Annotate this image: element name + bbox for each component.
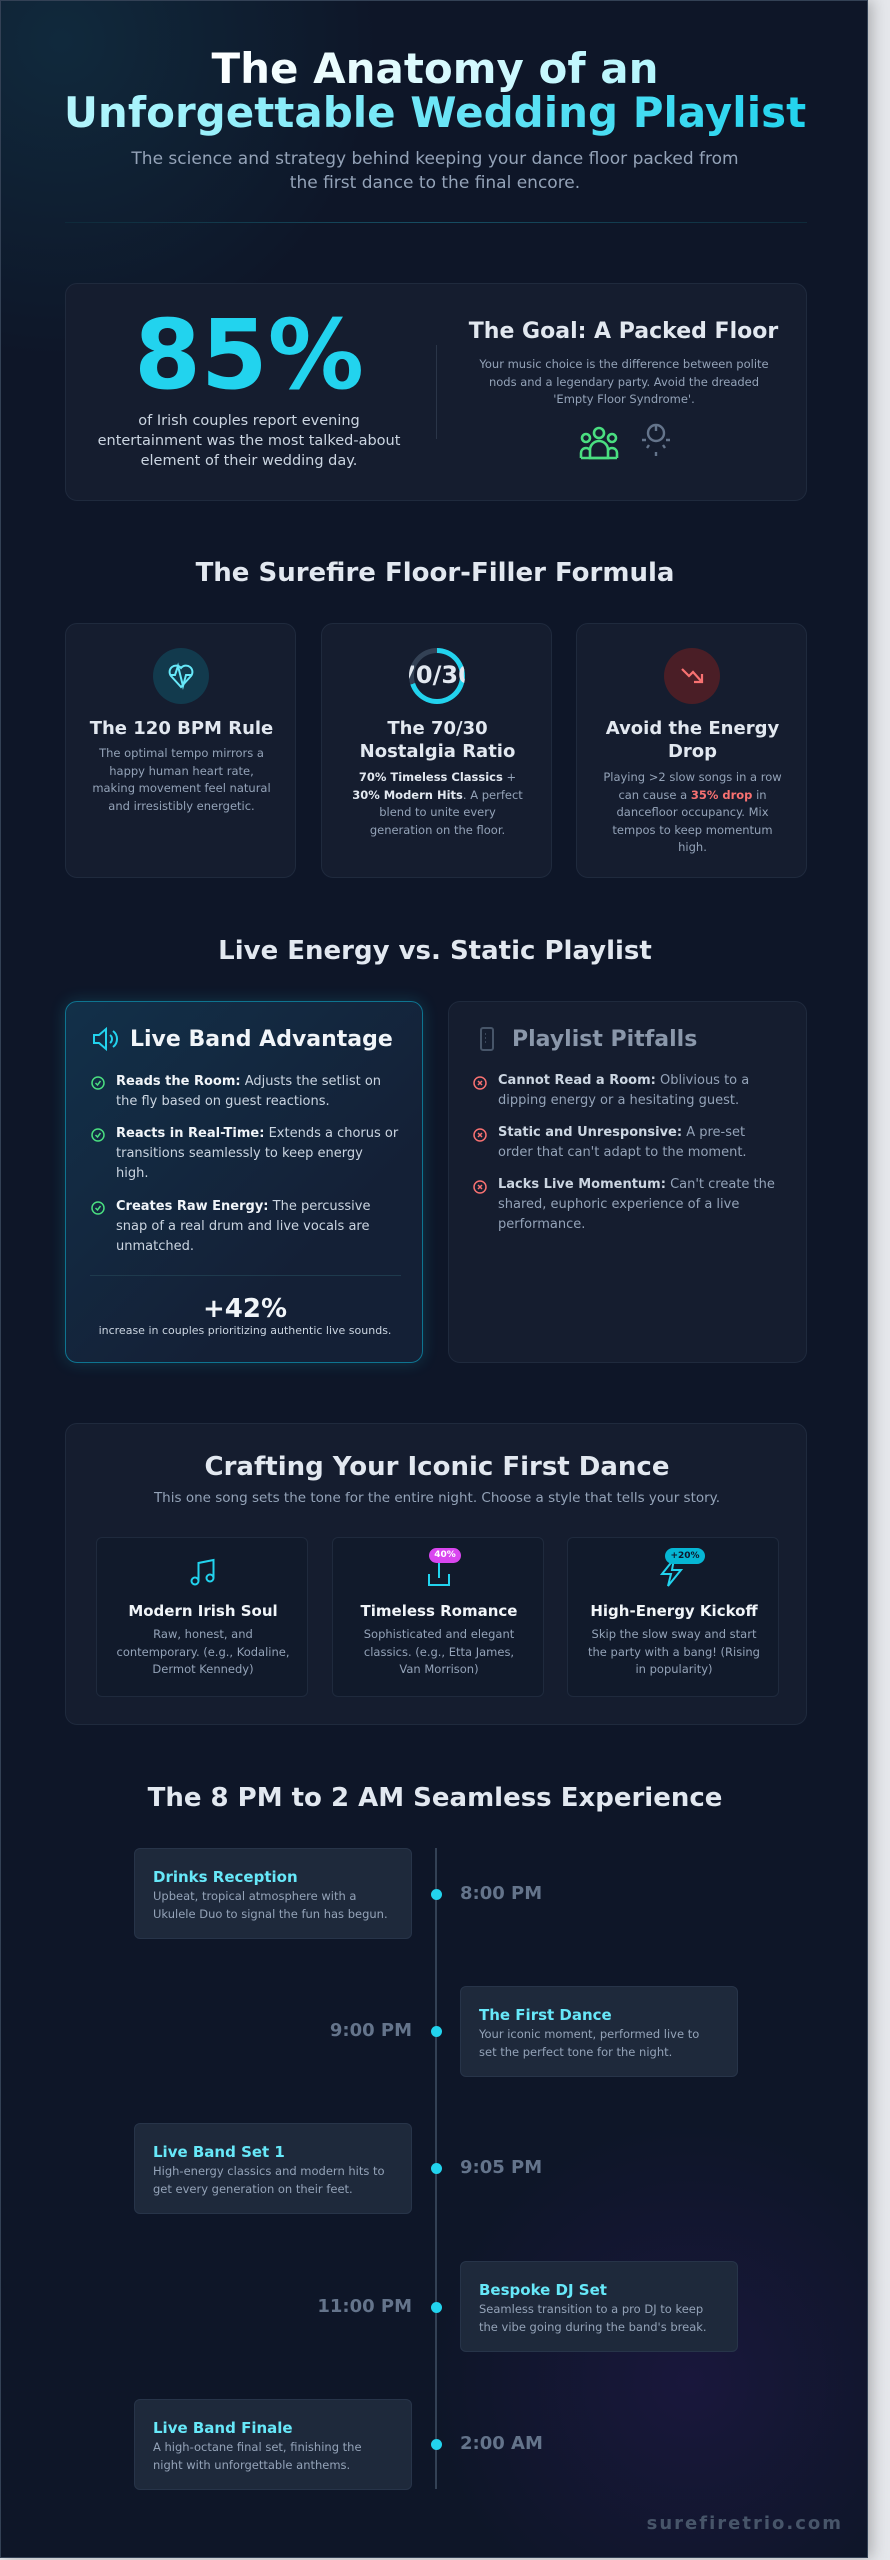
event: DJ set: [317, 2261, 738, 2352]
subtitle: The science and strategy behind keeping your dance floor packed from the first dance to the final encore.: [131, 149, 739, 193]
stat: +42%: +42%: [203, 1294, 287, 1324]
event: drinks reception: Ukulele Duo to signal the fun has begun.: [153, 1907, 388, 1921]
event: first dance: Your iconic moment, performed live to set the perfect tone for the night.: [479, 2027, 699, 2059]
heading: formula: The Surefire Floor-Filler Formula: [196, 558, 674, 588]
list: advantages: Creates Raw Energy: The percussive snap of a real drum and live vocals are unmatched.: [116, 1199, 370, 1254]
card text: The optimal tempo mirrors a happy human heart rate, making movement feel natural and irresistibly energetic.: [92, 746, 271, 812]
icon: ratio ring: [409, 648, 465, 704]
option: timeless romance: Timeless Romance: [361, 1602, 517, 1620]
event: finale: [134, 2399, 543, 2490]
event: DJ set: Bespoke DJ Set: [479, 2281, 607, 2299]
list: advantages: high.: [116, 1166, 148, 1181]
option: modern irish soul: [96, 1537, 308, 1697]
list: advantages: Reads the Room: Adjusts the setlist on the fly based on guest reactions.: [116, 1074, 381, 1109]
panel: live band: [65, 1001, 423, 1363]
event: finale: Live Band Finale: [153, 2419, 293, 2437]
event: drinks reception: [134, 1848, 542, 1939]
card title: Avoid the Energy: [606, 718, 779, 739]
event: first dance: 9:00 PM: [330, 2020, 412, 2041]
event: live band set 1: [134, 2123, 542, 2214]
panel: energy drop: [576, 623, 807, 878]
event: finale: 2:00 AM: [460, 2433, 543, 2454]
title: Unforgettable Wedding Playlist: [64, 88, 806, 137]
goal text: Your music choice is the difference between polite nods and a legendary party. Avoid the dreaded 'Empty Floor Syndrome'.: [479, 357, 769, 406]
heading: Playlist Pitfalls: [512, 1027, 697, 1052]
panel: first dance: [65, 1423, 807, 1725]
card title: Drop: [668, 741, 717, 762]
panel: 120 BPM: [65, 623, 296, 878]
panel: stat card: [65, 283, 807, 501]
option: modern irish soul: Modern Irish Soul: [128, 1602, 278, 1620]
card title: The 70/30: [387, 718, 488, 739]
stat caption: increase in couples prioritizing authentic live sounds.: [99, 1324, 391, 1337]
list: pitfalls: [473, 1073, 775, 1232]
heading: live vs static: Live Energy vs. Static Playlist: [218, 936, 652, 966]
option: timeless romance: Sophisticated and elegant classics. (e.g., Etta James, Van Morrison): [364, 1627, 514, 1676]
icon: disco ball: [642, 424, 670, 456]
icon: trend down: [664, 648, 720, 704]
card title: [360, 718, 515, 762]
title: The Anatomy of an: [211, 44, 659, 93]
panel: 70/30: [321, 623, 552, 878]
panel: playlist pitfalls: [448, 1001, 807, 1363]
event: live band set 1: 9:05 PM: [460, 2157, 542, 2178]
option: high-energy kickoff: High-Energy Kickoff: [590, 1602, 758, 1620]
event: DJ set: Seamless transition to a pro DJ to keep the vibe going during the band's break.: [479, 2302, 707, 2334]
heading: timeline: The 8 PM to 2 AM Seamless Experience: [148, 1783, 722, 1813]
list: advantages: Reacts in Real-Time: Extends a chorus or: [116, 1126, 398, 1141]
list: pitfalls: Cannot Read a Room: Oblivious to a dipping energy or a hesitating guest.: [498, 1073, 749, 1108]
icon: phone: [480, 1027, 494, 1051]
icon: share with badge: [428, 1563, 450, 1586]
option: high-energy kickoff: Skip the slow sway and start the party with a bang! (Rising in popularity): [588, 1627, 760, 1676]
stat caption: of Irish couples report evening entertainment was the most talked-about element of their wedding day.: [98, 413, 400, 469]
icon: crowd: [580, 426, 618, 460]
icon: lightning with badge: [660, 1563, 683, 1587]
footer: brand: surefiretrio.com: [647, 2513, 843, 2534]
event: drinks reception: Upbeat, tropical atmosphere with a: [153, 1889, 356, 1903]
icon: speaker: [93, 1027, 118, 1051]
heading: Live Band Advantage: [130, 1027, 393, 1052]
icon: heart pulse: [153, 648, 209, 704]
card title: Nostalgia Ratio: [360, 741, 515, 762]
icon: music note: [190, 1558, 214, 1586]
option: timeless romance: [332, 1537, 544, 1697]
list: pitfalls: Static and Unresponsive: A pre-set order that can't adapt to the moment.: [498, 1125, 747, 1160]
subtitle: This one song sets the tone for the entire night. Choose a style that tells your story.: [154, 1490, 720, 1506]
option: high-energy kickoff: [567, 1537, 779, 1697]
card text: 70% Timeless Classics + 30% Modern Hits. A perfect blend to unite every generation on the floor.: [352, 770, 523, 836]
event: drinks reception: Drinks Reception: [153, 1868, 298, 1886]
card title: The 120 BPM Rule: [90, 718, 273, 739]
option: high-energy kickoff: +20%: [670, 1551, 700, 1561]
timeline: [134, 1848, 738, 2490]
event: live band set 1: Live Band Set 1: [153, 2143, 285, 2161]
card title: [606, 718, 779, 762]
event: first dance: The First Dance: [479, 2006, 612, 2024]
list: pitfalls: Lacks Live Momentum: Can't create the shared, euphoric experience of a live performance.: [498, 1177, 775, 1232]
event: first dance: [330, 1986, 738, 2077]
event: finale: A high-octane final set, finishing the night with unforgettable anthems.: [153, 2440, 362, 2472]
event: DJ set: 11:00 PM: [317, 2296, 412, 2317]
list: advantages: [91, 1074, 398, 1254]
stat number: 85%: [134, 299, 364, 411]
event: live band set 1: High-energy classics and modern hits to get every generation on their feet.: [153, 2164, 385, 2196]
option: timeless romance: 40%: [434, 1550, 456, 1560]
card text: Playing >2 slow songs in a row can cause a 35% drop in dancefloor occupancy. Mix tempos to keep momentum high.: [603, 770, 782, 854]
goal heading: The Goal: A Packed Floor: [469, 319, 778, 344]
event: drinks reception: 8:00 PM: [460, 1883, 542, 1904]
option: modern irish soul: Raw, honest, and contemporary. (e.g., Kodaline, Dermot Kennedy): [116, 1627, 290, 1676]
title: [64, 44, 806, 137]
heading: Crafting Your Iconic First Dance: [205, 1452, 669, 1482]
list: advantages: transitions seamlessly to keep energy: [116, 1146, 363, 1161]
